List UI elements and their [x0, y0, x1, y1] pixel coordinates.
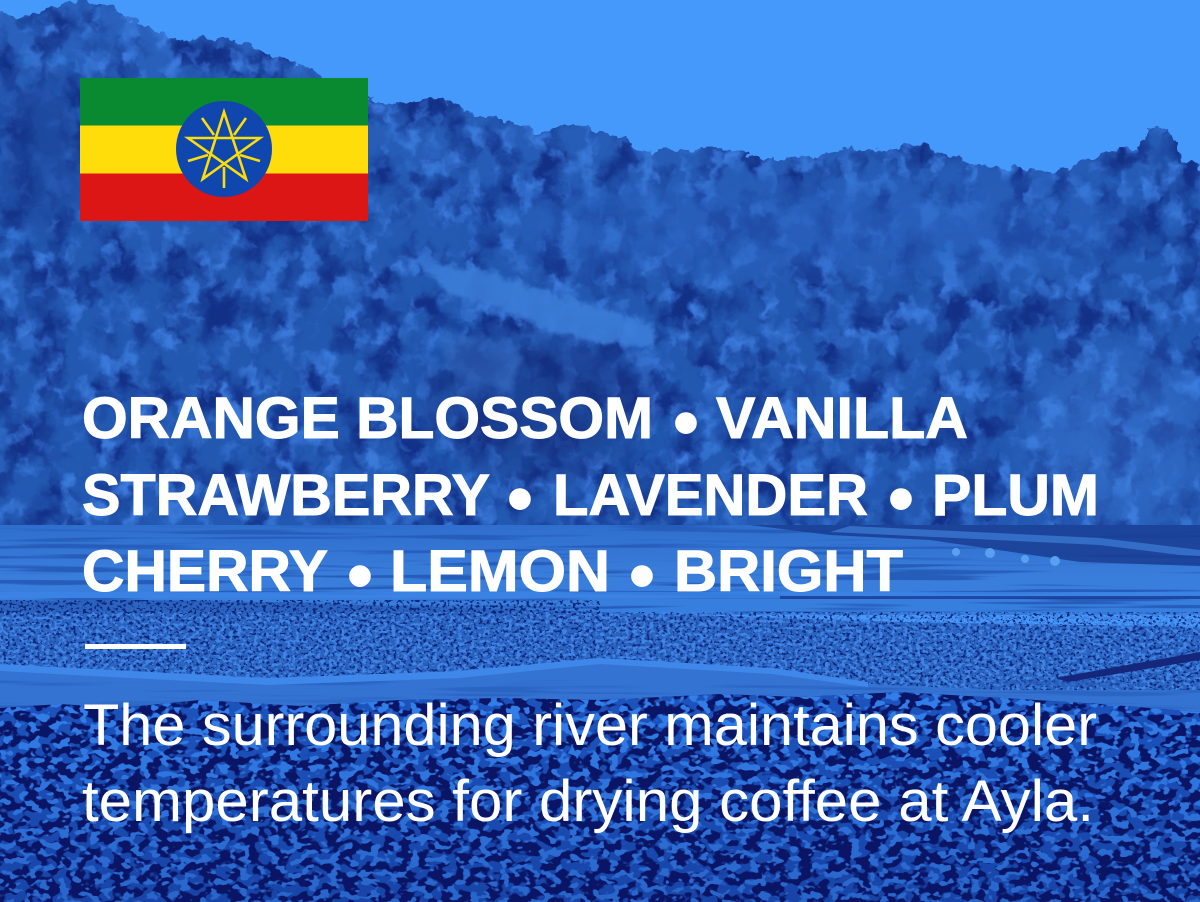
emblem: blue disc with star [176, 101, 272, 197]
fine cherries bed [0, 600, 1200, 700]
drying beds, far [0, 525, 1200, 615]
line 3: • [347, 536, 373, 616]
foreground coffee cherries [0, 688, 1200, 902]
line 1: The surrounding river maintains cooler [83, 693, 1097, 758]
line 3: BRIGHT [674, 539, 903, 604]
light posts on the beds [952, 548, 1060, 566]
divider rule [85, 644, 186, 649]
green stripe [80, 78, 368, 126]
line 1: ORANGE BLOSSOM [82, 386, 653, 451]
description text [82, 693, 1097, 834]
line 2: STRAWBERRY [82, 463, 490, 528]
line 3: CHERRY [82, 539, 328, 604]
red stripe [80, 174, 368, 221]
line 3 [82, 536, 903, 616]
line 1: VANILLA [716, 386, 968, 451]
line 2: temperatures for drying coffee at Ayla. [82, 769, 1094, 834]
raised beds on the right [750, 525, 1200, 566]
line 2: LAVENDER [553, 463, 868, 528]
Ethiopian flag [80, 78, 368, 221]
forested hill [0, 0, 1200, 560]
tasting notes heading [82, 383, 1099, 616]
line 1 [82, 383, 968, 463]
sky [0, 0, 1200, 210]
yellow stripe [80, 126, 368, 174]
line 2 [82, 459, 1099, 539]
line 2: PLUM [932, 463, 1099, 528]
line 2: • [507, 459, 533, 539]
line 2: • [888, 459, 914, 539]
line 1: • [673, 383, 699, 463]
line 3: LEMON [390, 539, 610, 604]
bed edge with netting [0, 662, 1200, 712]
line 3: • [629, 536, 655, 616]
